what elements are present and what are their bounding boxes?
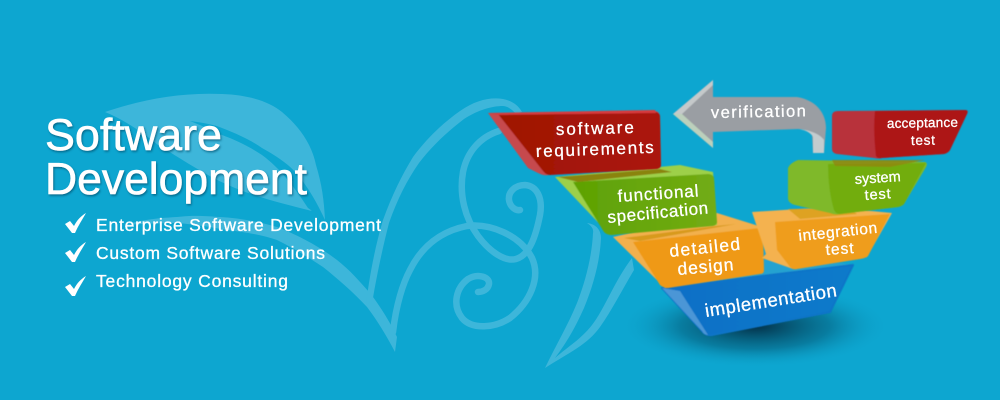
- title: [45, 111, 308, 204]
- block: integration test: test: [825, 240, 855, 259]
- block: system test: [788, 160, 927, 214]
- block: functional specification: specification: [607, 198, 709, 227]
- background leaf ornament: [105, 94, 634, 368]
- block: system test: test: [864, 186, 891, 204]
- block: detailed design: detailed: [668, 234, 741, 261]
- arrow: verification: verification: [711, 102, 806, 122]
- bullet text: enterprise: Enterprise Software Development: [96, 215, 381, 235]
- bullet text: custom: Custom Software Solutions: [96, 243, 325, 263]
- icon: check mark: [65, 213, 86, 233]
- block: functional specification: [555, 165, 717, 235]
- title: Software: [45, 111, 222, 160]
- block: integration test: [752, 207, 892, 269]
- block: detailed design: [613, 213, 764, 288]
- V-model diagram: [488, 80, 968, 335]
- block: software requirements: software: [556, 118, 634, 139]
- block: functional specification: functional: [617, 181, 699, 206]
- bullet text: technology: Technology Consulting: [96, 271, 288, 291]
- block: acceptance test: test: [911, 133, 935, 148]
- icon: check mark: [65, 276, 86, 296]
- shadow under pyramid: [620, 284, 890, 368]
- block: detailed design: design: [677, 254, 734, 279]
- bullet list: [65, 213, 381, 296]
- block: acceptance test: [832, 110, 968, 158]
- icon: check mark: [65, 242, 86, 262]
- arrow: verification: [673, 80, 826, 153]
- block: software requirements: requirements: [535, 138, 654, 161]
- block: integration test: integration: [798, 220, 878, 245]
- block: acceptance test: acceptance: [887, 115, 958, 131]
- block: software requirements: [488, 110, 661, 175]
- block: implementation: implementation: [703, 279, 838, 321]
- title: Development: [45, 155, 308, 204]
- block: implementation: [662, 250, 853, 335]
- block: system test: system: [854, 169, 901, 188]
